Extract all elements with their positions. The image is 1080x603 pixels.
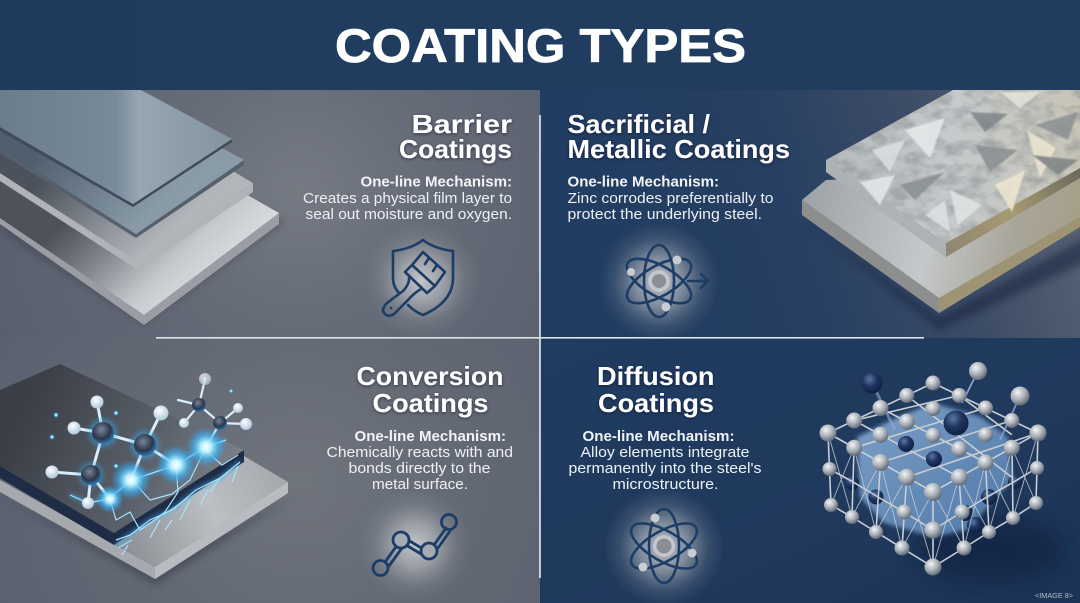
panel: conversion coatings bbox=[0, 338, 540, 603]
mechanism text: protect the underlying steel. bbox=[568, 206, 762, 223]
spangle texture bbox=[826, 90, 1080, 243]
mechanism text: Alloy elements integrate bbox=[580, 444, 750, 461]
floating atom trails bbox=[875, 378, 1017, 440]
molecule glows bbox=[75, 415, 226, 513]
icon: shield with paint brush bbox=[364, 222, 480, 338]
mechanism text: permanently into the steel's bbox=[568, 460, 762, 477]
title: COATING TYPES bbox=[335, 19, 746, 72]
heading bbox=[399, 109, 512, 164]
image tag: <IMAGE 8> bbox=[1035, 591, 1074, 600]
heading: Coatings bbox=[372, 388, 488, 418]
mechanism text: bonds directly to the bbox=[348, 460, 490, 477]
image: zinc coated steel plates bbox=[802, 90, 1080, 330]
mechanism text bbox=[568, 174, 774, 223]
diffusing atoms bbox=[862, 362, 1030, 467]
mechanism text: microstructure. bbox=[612, 476, 718, 493]
inner blue volume bbox=[857, 403, 1012, 537]
heading bbox=[356, 361, 504, 418]
mechanism text: One-line Mechanism: bbox=[582, 428, 734, 445]
heading: Diffusion bbox=[597, 361, 714, 391]
icon: molecule chain bbox=[359, 489, 471, 601]
mechanism text bbox=[568, 428, 762, 493]
spangle facets bbox=[860, 92, 1078, 232]
heading: Coatings bbox=[598, 388, 714, 418]
top layer atoms bbox=[820, 376, 1046, 501]
heading: Conversion bbox=[356, 361, 504, 391]
molecule bonds bbox=[52, 379, 246, 503]
mechanism text: Chemically reacts with and bbox=[326, 444, 513, 461]
lattice lines bbox=[828, 383, 1038, 567]
mechanism text bbox=[326, 428, 513, 493]
mechanism text: One-line Mechanism: bbox=[360, 174, 512, 190]
dark interior atoms bbox=[845, 475, 1022, 533]
heading: Metallic Coatings bbox=[568, 134, 790, 164]
mechanism text: One-line Mechanism: bbox=[568, 174, 719, 190]
heading: Sacrificial / bbox=[568, 109, 710, 139]
mechanism text: Creates a physical film layer to bbox=[303, 190, 512, 207]
image: crystal lattice with diffusing atoms bbox=[820, 362, 1065, 582]
image: stacked coated plates bbox=[0, 90, 285, 325]
molecule atoms bbox=[46, 373, 252, 509]
panel: diffusion coatings bbox=[570, 362, 1080, 603]
mechanism text: One-line Mechanism: bbox=[354, 428, 506, 445]
glowing cracks halo bbox=[70, 440, 240, 545]
icon: atom with arrow bbox=[599, 222, 719, 342]
glowing cracks bbox=[70, 440, 240, 555]
image: conversion coating plate with molecules bbox=[0, 364, 295, 585]
heading bbox=[568, 109, 790, 164]
header band bbox=[0, 0, 1080, 90]
panel: barrier coatings bbox=[0, 90, 540, 338]
side atoms bbox=[822, 461, 1044, 576]
mechanism text bbox=[303, 174, 512, 223]
panel: sacrificial / metallic coatings bbox=[540, 90, 1080, 342]
mechanism text: seal out moisture and oxygen. bbox=[306, 206, 512, 223]
icon: atom bbox=[604, 487, 724, 603]
mechanism text: Zinc corrodes preferentially to bbox=[568, 190, 774, 207]
heading bbox=[597, 361, 714, 418]
mechanism text: metal surface. bbox=[372, 476, 468, 493]
heading: Coatings bbox=[399, 134, 512, 164]
heading: Barrier bbox=[412, 109, 512, 139]
